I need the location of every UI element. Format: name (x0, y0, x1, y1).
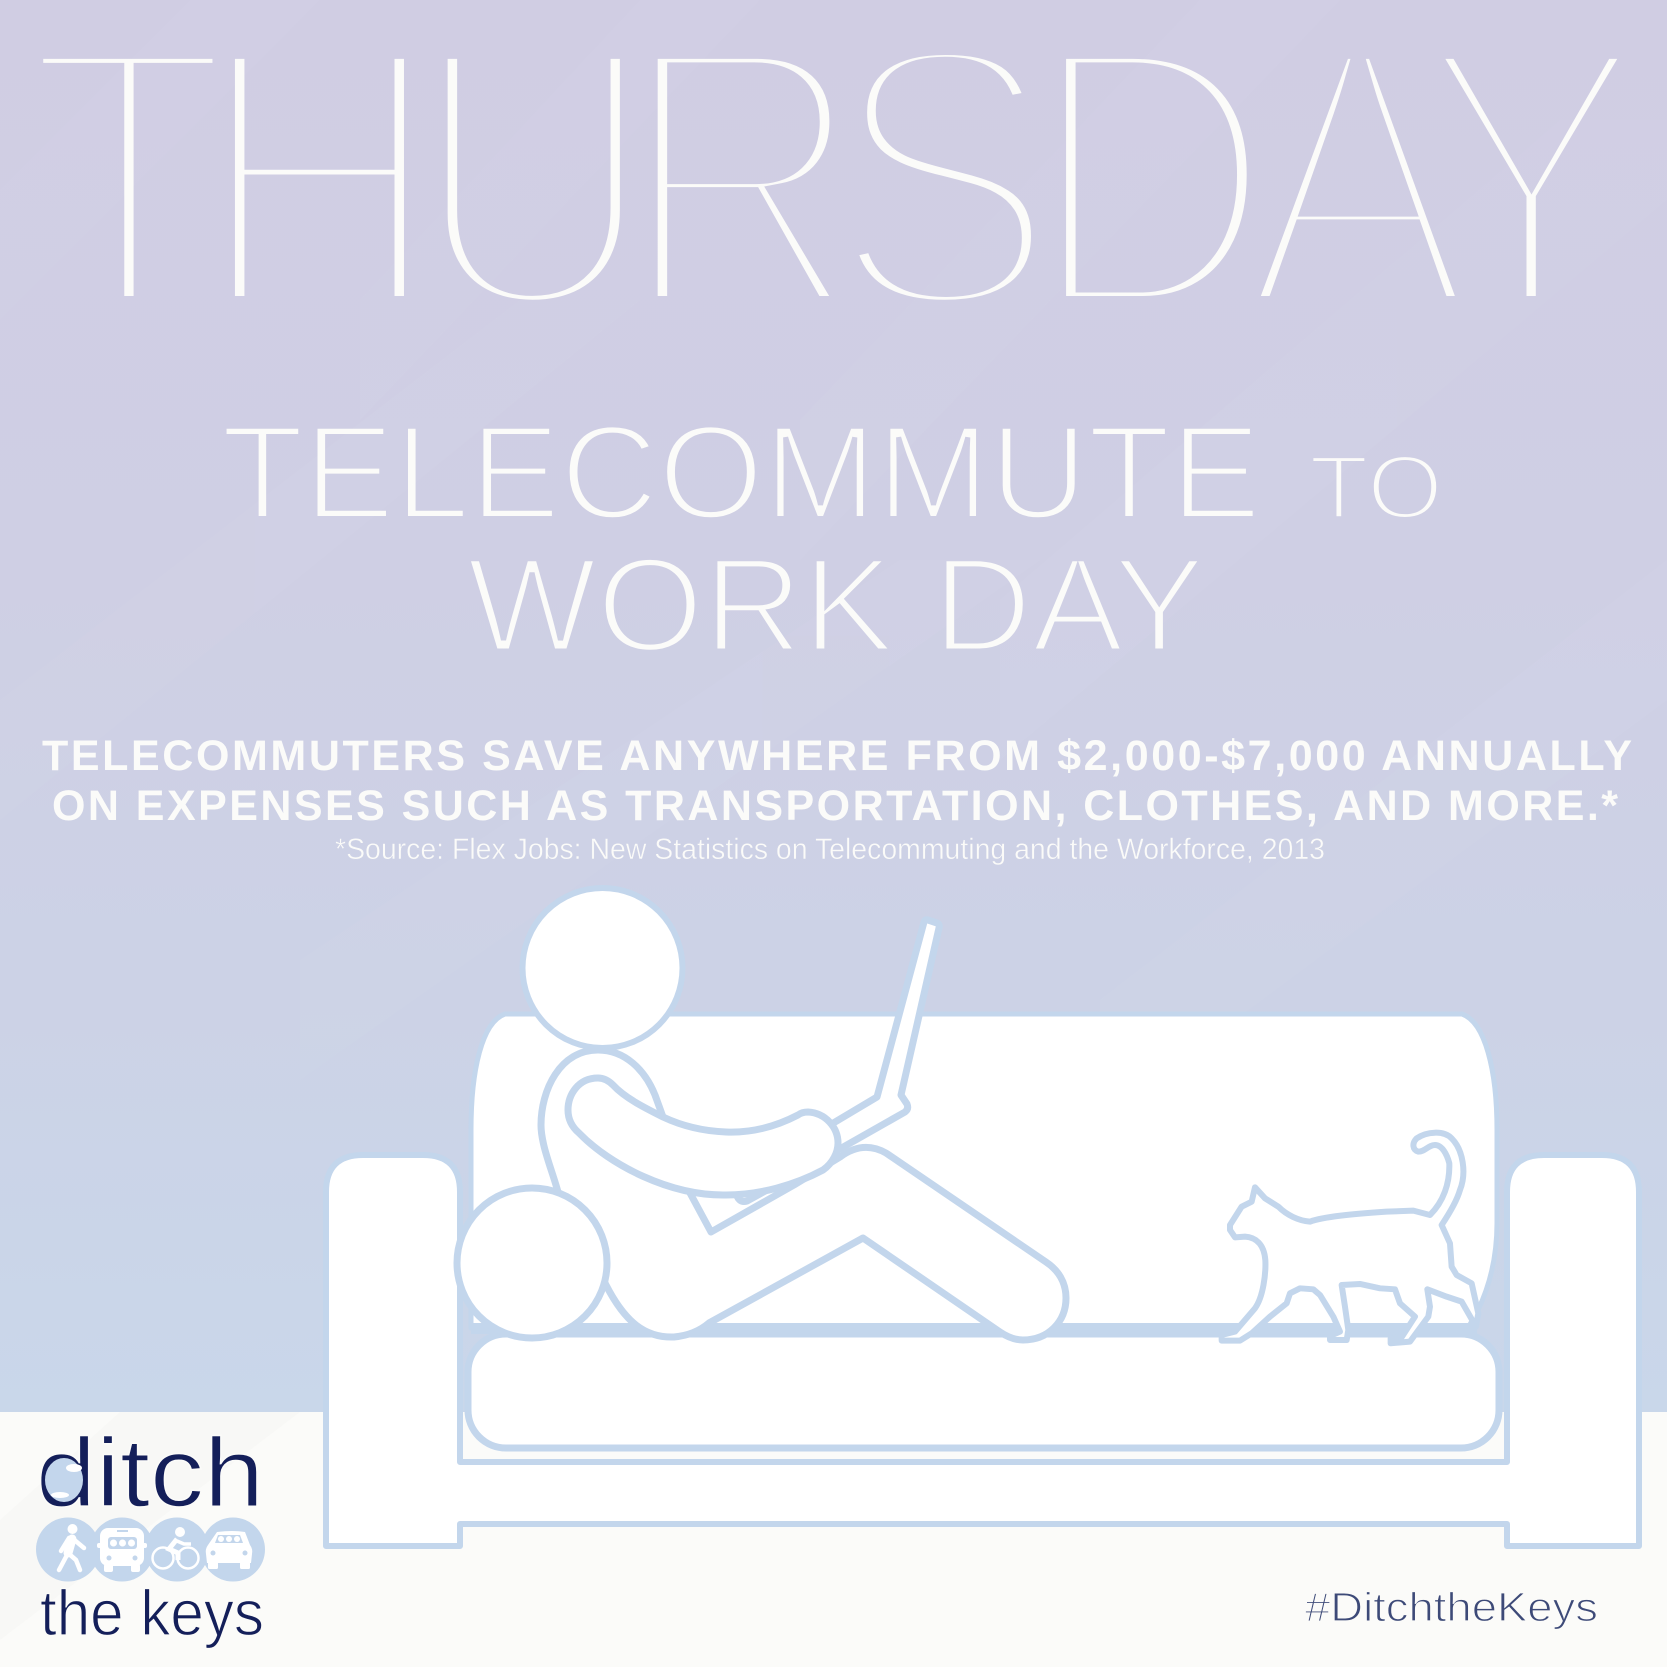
statistic text: TELECOMMUTERS SAVE ANYWHERE FROM $2,000-$7,000 ANNUALLY (42, 732, 1632, 780)
pillow (457, 1188, 607, 1338)
statistic text: ON EXPENSES SUCH AS TRANSPORTATION, CLOTHES, AND MORE.* (52, 782, 1618, 830)
wordmark: the keys: the keys (40, 1577, 264, 1649)
body and leg (541, 1050, 1066, 1340)
arm (568, 1078, 838, 1195)
source note: *Source: Flex Jobs: New Statistics on Telecommuting and the Workforce, 2013 (335, 833, 1325, 866)
icon: car (206, 1531, 252, 1569)
heading: telecommute to work day: TO (1309, 438, 1443, 538)
heading: telecommute to work day (221, 398, 1443, 680)
icon: bus (97, 1528, 147, 1572)
laptop (830, 920, 939, 1150)
statistic text (42, 732, 1632, 830)
hashtag: #DitchtheKeys (1305, 1584, 1598, 1630)
icon: walker (59, 1524, 84, 1570)
seat band (471, 1323, 1477, 1334)
cat (1222, 1133, 1478, 1343)
sky inside d (45, 1458, 83, 1502)
icon: bicycle (152, 1527, 198, 1568)
logo: ditch the keys (36, 1418, 265, 1649)
heading: telecommute to work day: TELECOMMUTE (221, 398, 1261, 548)
laptop base (735, 1172, 800, 1202)
sofa arms and base (326, 1155, 1639, 1546)
head (522, 888, 682, 1048)
seat cushion (468, 1334, 1499, 1448)
wordmark: ditch: ditch (36, 1418, 264, 1527)
transport circles (36, 1518, 265, 1582)
heading: telecommute to work day: WORK DAY (467, 531, 1205, 680)
sofa back (471, 1014, 1497, 1328)
illustration: person on sofa with cat (326, 888, 1639, 1546)
